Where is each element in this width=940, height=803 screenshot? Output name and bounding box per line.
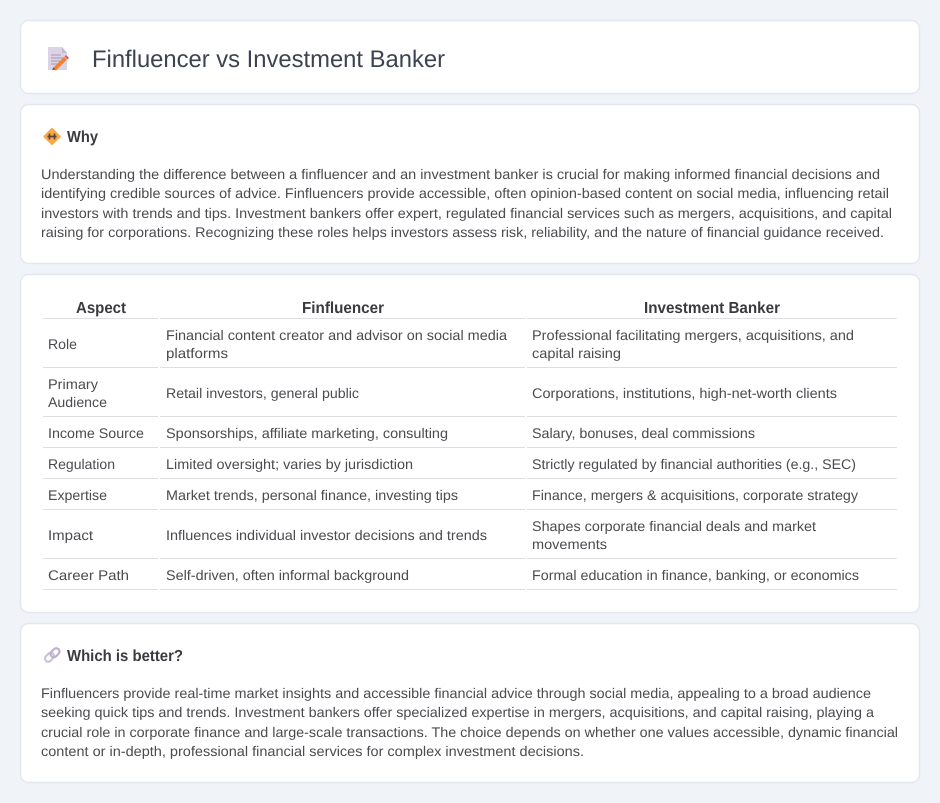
table row: career path: Formal education in finance, banking, or economics xyxy=(532,567,859,583)
panel: comparison table xyxy=(20,274,920,612)
panel: which is better xyxy=(20,624,920,782)
text block: why paragraph: raising for corporations. Recognizing these roles helps investors assess risk, reliability, and the nature of financial guidance received. xyxy=(41,224,884,240)
table row: regulation: Regulation xyxy=(48,456,115,472)
table row: primary audience: Audience xyxy=(48,394,107,410)
text block: why paragraph xyxy=(41,166,892,240)
table row: impact: movements xyxy=(532,536,607,552)
text block: which is better paragraph: seeking quick tips and trends. Investment bankers offer specialized expertise in mergers, acquisitions, and capital raising, playing a xyxy=(41,704,874,720)
table row: regulation: Strictly regulated by financial authorities (e.g., SEC) xyxy=(532,456,856,472)
text block: which is better paragraph: crucial role in corporate finance and large-scale transactions. The choice depends on whether one values accessible, dynamic financial xyxy=(41,724,898,740)
table row: expertise: Market trends, personal finance, investing tips xyxy=(166,487,458,503)
table row: regulation xyxy=(43,456,897,479)
heading: why: Why xyxy=(67,129,98,146)
text block: why paragraph: Understanding the difference between a finfluencer and an investment banker is crucial for making informed financial decisions and xyxy=(41,166,880,182)
text block: which is better paragraph: Finfluencers provide real-time market insights and accessible financial advice through social media, appealing to a broad audience xyxy=(41,685,871,701)
panel: title header xyxy=(20,20,920,94)
table row: impact xyxy=(43,518,897,559)
table row: role: Role xyxy=(48,336,77,352)
table row: role: Financial content creator and advisor on social media xyxy=(166,327,507,343)
table row: expertise: Finance, mergers & acquisitions, corporate strategy xyxy=(532,487,858,503)
table row: career path xyxy=(43,567,897,590)
table row: career path: Career Path xyxy=(48,567,129,583)
table row: income source xyxy=(43,425,897,448)
table header row: Finfluencer xyxy=(302,300,384,317)
table row: primary audience: Primary xyxy=(48,376,98,392)
table header row: Investment Banker xyxy=(644,300,780,317)
table row: expertise: Expertise xyxy=(48,487,107,503)
icon: diamond road sign xyxy=(44,128,60,144)
table row: impact: Influences individual investor decisions and trends xyxy=(166,527,487,543)
text block: why paragraph: investors with trends and tips. Investment bankers offer expert, regulated financial services such as mergers, acquisitions, and capital xyxy=(41,205,892,221)
text block: which is better paragraph: content or in-depth, professional financial services for complex investment decisions. xyxy=(41,743,584,759)
table row: income source: Salary, bonuses, deal commissions xyxy=(532,425,755,441)
table row: role xyxy=(43,327,897,368)
table row: income source: Sponsorships, affiliate marketing, consulting xyxy=(166,425,448,441)
table row: expertise xyxy=(43,487,897,510)
panel: why xyxy=(20,104,920,264)
text block: which is better paragraph xyxy=(41,685,898,759)
table row: primary audience: Retail investors, general public xyxy=(166,385,359,401)
table row: regulation: Limited oversight; varies by jurisdiction xyxy=(166,456,413,472)
table row: role: capital raising xyxy=(532,345,621,361)
table header row xyxy=(43,300,897,319)
icon: chain link xyxy=(44,647,61,663)
table row: primary audience: Corporations, institutions, high-net-worth clients xyxy=(532,385,837,401)
table header row: Aspect xyxy=(76,300,127,317)
title: Finfluencer vs Investment Banker xyxy=(92,46,445,73)
table row: role: Professional facilitating mergers, acquisitions, and xyxy=(532,327,854,343)
table row: impact: Shapes corporate financial deals and market xyxy=(532,518,816,534)
table row: career path: Self-driven, often informal background xyxy=(166,567,409,583)
icon: document with pencil xyxy=(48,47,69,71)
table row: role: platforms xyxy=(166,345,228,361)
heading: which is better: Which is better? xyxy=(67,648,183,665)
table row: impact: Impact xyxy=(48,527,93,543)
text block: why paragraph: identifying credible sources of advice. Finfluencers provide accessible, often opinion-based content on social media, influencing retail xyxy=(41,185,889,201)
table row: primary audience xyxy=(43,376,897,417)
table row: income source: Income Source xyxy=(48,425,144,441)
